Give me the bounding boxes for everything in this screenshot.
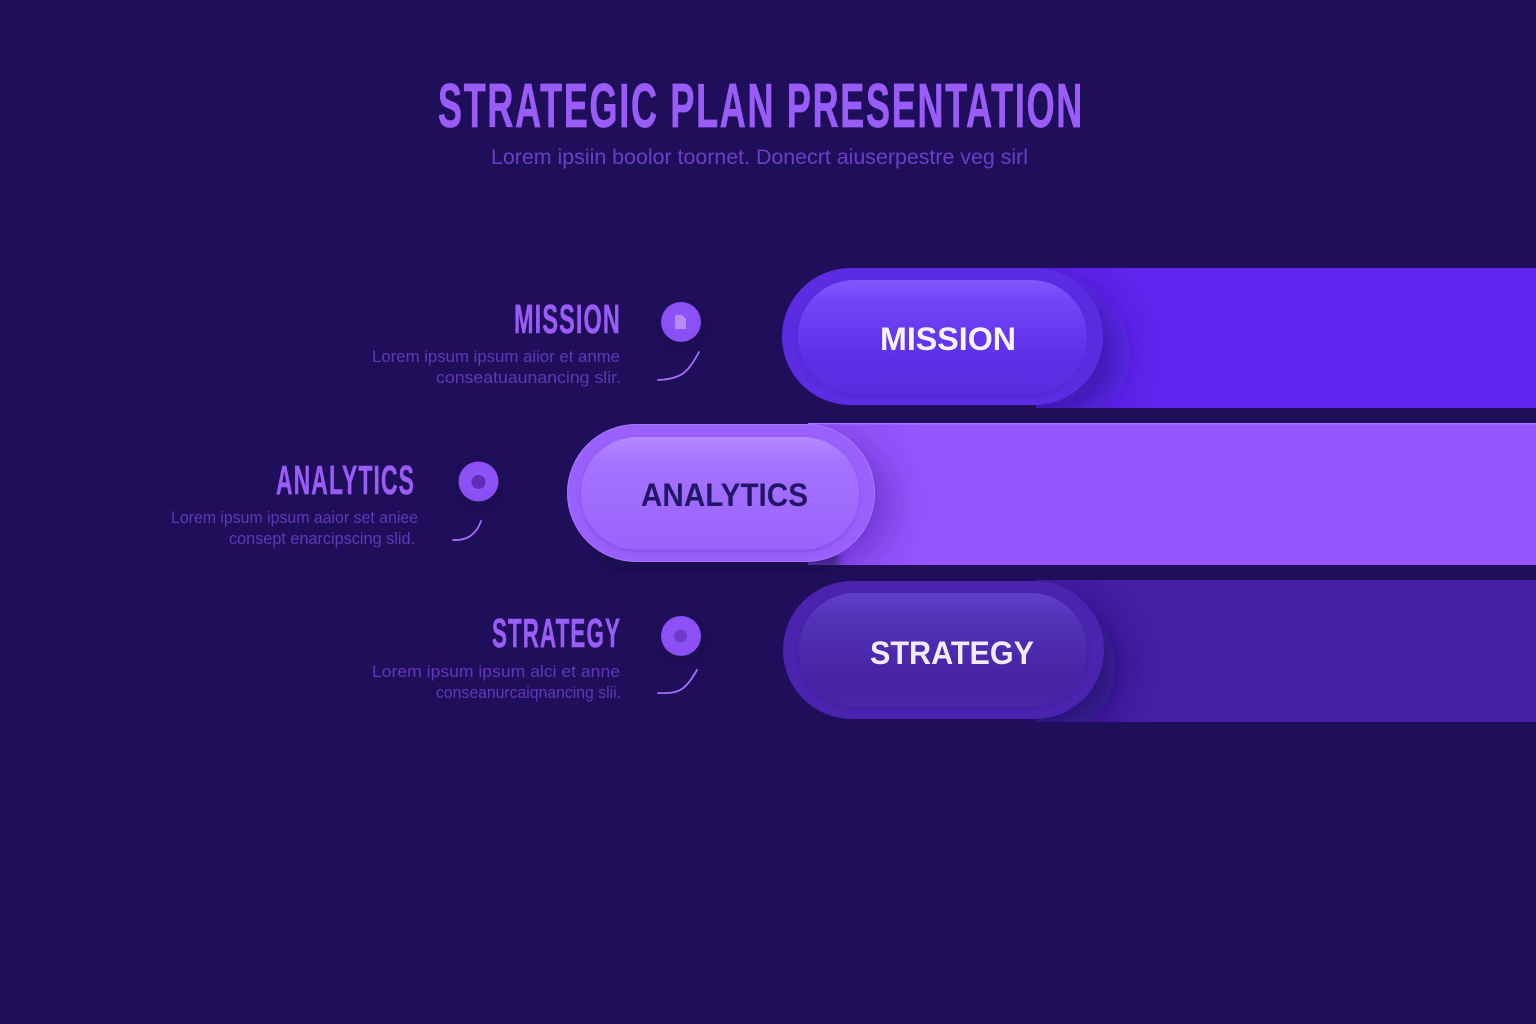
icon: analytics dot bbox=[458, 462, 500, 506]
mission connector bbox=[658, 352, 699, 380]
strategy description bbox=[372, 663, 621, 702]
analytics outer pill bbox=[567, 424, 875, 562]
panel: strategy text bbox=[372, 610, 621, 702]
mission heading: MISSION bbox=[514, 296, 621, 342]
strategy inner pill bbox=[799, 593, 1087, 709]
analytics bar shadow bbox=[808, 424, 907, 565]
mission outer pill bbox=[782, 268, 1103, 405]
analytics description: Lorem ipsum ipsum aaior set aniee bbox=[171, 509, 418, 527]
analytics description bbox=[171, 509, 418, 548]
strategy outer pill bbox=[783, 581, 1104, 719]
analytics button label: ANALYTICS bbox=[641, 477, 808, 513]
strategy heading: STRATEGY bbox=[492, 610, 621, 656]
icon: strategy dot bbox=[661, 616, 703, 661]
analytics inner pill bbox=[581, 437, 859, 552]
mission inner pill bbox=[798, 280, 1087, 396]
analytics description: consept enarcipscing slid. bbox=[229, 530, 415, 548]
strategy connector bbox=[658, 670, 697, 693]
strategy button label: STRATEGY bbox=[870, 635, 1034, 671]
title: STRATEGIC PLAN PRESENTATION bbox=[438, 72, 1084, 141]
analytics bar bbox=[808, 424, 1536, 565]
subtitle: Lorem ipsiin boolor toornet. Donecrt aiuserpestre veg sirl bbox=[491, 146, 1028, 169]
analytics heading: ANALYTICS bbox=[276, 457, 415, 503]
mission button label: MISSION bbox=[880, 321, 1016, 357]
analytics connector bbox=[453, 521, 481, 540]
mission description: Lorem ipsum ipsum aiior et anme bbox=[372, 348, 620, 366]
mission description: conseatuaunancing slir. bbox=[436, 369, 621, 387]
icon: mission dot bbox=[661, 302, 703, 347]
mission bar shadow bbox=[1036, 268, 1138, 408]
strategy bar bbox=[1036, 580, 1536, 722]
panel: analytics text bbox=[171, 457, 418, 548]
strategy description: conseanurcaiqnancing slii. bbox=[436, 684, 621, 702]
panel: strategy band bbox=[783, 580, 1536, 734]
strategy description: Lorem ipsum ipsum alci et anne bbox=[372, 663, 620, 681]
panel: mission text bbox=[372, 296, 621, 387]
panel: mission band bbox=[782, 268, 1536, 420]
mission bar bbox=[1036, 268, 1536, 408]
analytics pill ground shadow bbox=[600, 548, 840, 568]
strategy bar shadow bbox=[1036, 580, 1136, 722]
panel: analytics band bbox=[567, 423, 1536, 572]
mission description bbox=[372, 348, 621, 387]
